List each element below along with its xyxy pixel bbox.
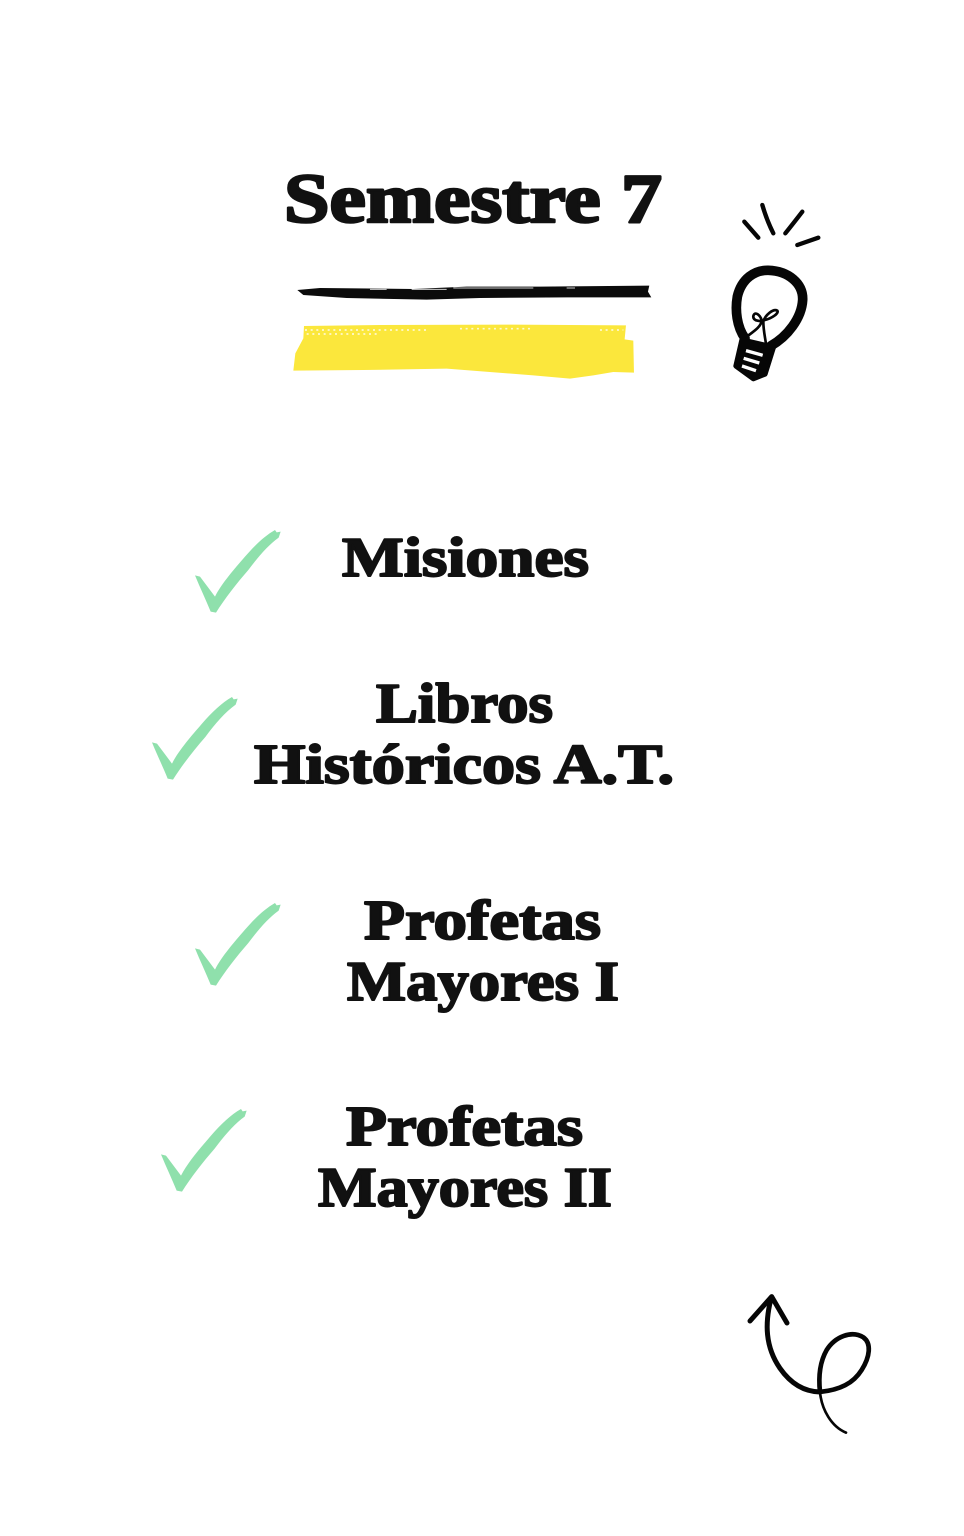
arrow shaft (767, 1300, 820, 1392)
label: Libros (376, 673, 553, 735)
arrow head (750, 1297, 787, 1323)
label: Mayores II (318, 1157, 612, 1219)
title: Semestre 7 (284, 161, 662, 238)
label: Misiones (342, 527, 589, 589)
list item: Libros Históricos A.T. (152, 673, 674, 796)
light rays (744, 205, 818, 245)
label: Mayores I (347, 951, 619, 1013)
icon: check mark (195, 903, 281, 986)
list item: Profetas Mayores II (161, 1096, 612, 1219)
list item: Profetas Mayores I (195, 890, 619, 1013)
base threads (742, 351, 763, 371)
label (318, 1096, 612, 1219)
filament (747, 310, 778, 344)
bulb glass (736, 270, 803, 346)
icon: check mark (152, 697, 238, 780)
label: Profetas (346, 1096, 583, 1158)
yellow brush highlight (293, 325, 634, 379)
label (254, 673, 674, 796)
arrow: curly loop arrow (750, 1297, 869, 1433)
label: Históricos A.T. (254, 734, 674, 796)
black brush stroke underline (297, 286, 651, 300)
label: Profetas (364, 890, 601, 952)
icon: check mark (195, 530, 281, 613)
bulb base (736, 340, 773, 379)
tail (820, 1392, 846, 1433)
loop (819, 1334, 869, 1392)
icon: light bulb (736, 205, 818, 379)
list item: Misiones (195, 527, 589, 613)
icon: check mark (161, 1109, 247, 1192)
label (347, 890, 619, 1013)
